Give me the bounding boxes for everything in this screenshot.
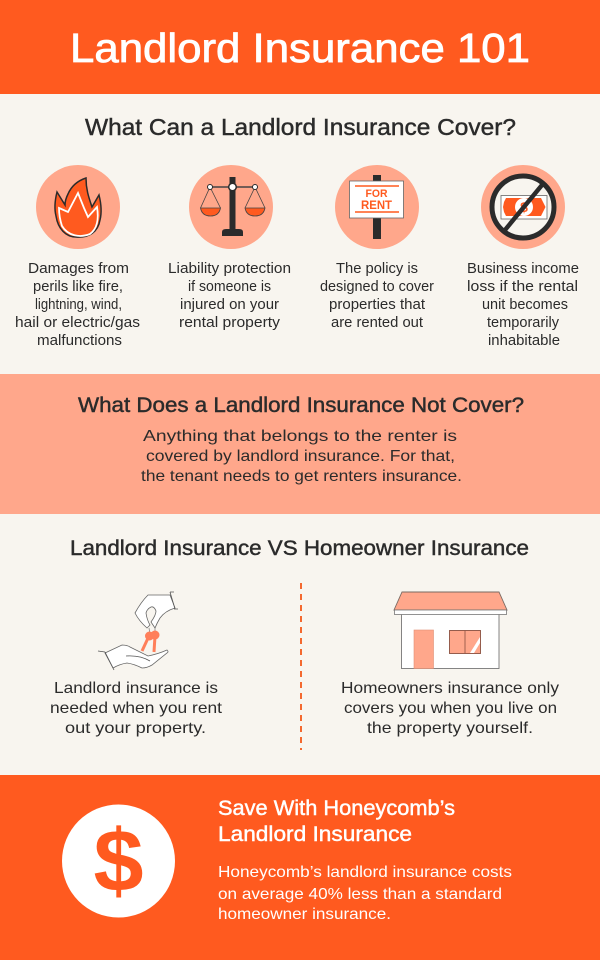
panel: save with honeycomb: on average 40% less than a standard — [218, 886, 502, 903]
heading: landlord vs homeowner: Landlord Insurance VS Homeowner Insurance — [70, 537, 529, 560]
heading: what can a landlord insurance cover: What Can a Landlord Insurance Cover? — [85, 114, 516, 140]
icon: dollar coin: $ — [94, 811, 144, 910]
panel: not covered: covered by landlord insurance. For that, — [146, 448, 455, 465]
icon: for rent sign: FOR — [366, 188, 388, 200]
icon: dollar coin — [62, 804, 175, 918]
text: liability: Liability protection — [168, 261, 291, 277]
text: damages: lightning, wind, — [35, 297, 122, 313]
text: liability — [168, 261, 291, 331]
text: policy — [320, 261, 434, 331]
text: business income: Business income — [467, 261, 579, 277]
panel: save with honeycomb: Honeycomb’s landlord insurance costs — [218, 864, 512, 881]
panel: save with honeycomb: Save With Honeycomb’s — [218, 797, 455, 820]
panel: not covered: What Does a Landlord Insurance Not Cover? — [78, 394, 524, 417]
text: homeowner note: covers you when you live on — [344, 700, 557, 717]
text: homeowner note — [341, 680, 559, 737]
icon: for rent sign — [335, 165, 419, 249]
text: homeowner note: Homeowners insurance only — [341, 680, 559, 697]
divider — [300, 583, 302, 750]
panel: save with honeycomb: Landlord Insurance — [218, 823, 412, 846]
text: damages: Damages from — [28, 261, 129, 277]
title banner — [0, 0, 600, 94]
panel: not covered — [0, 374, 600, 514]
text: damages — [15, 261, 140, 349]
text: liability: injured on your — [180, 297, 279, 313]
text: liability: rental property — [179, 315, 281, 331]
panel: save with honeycomb: homeowner insurance. — [218, 906, 391, 923]
text: landlord insurance note: needed when you rent — [50, 700, 223, 717]
text: damages: hail or electric/gas — [15, 315, 140, 331]
text: policy: are rented out — [331, 315, 423, 331]
icon: fire — [36, 165, 120, 249]
text: policy: designed to cover — [320, 279, 434, 295]
icon: scales — [189, 165, 273, 249]
icon: no money — [481, 165, 565, 249]
panel: not covered: Anything that belongs to the renter is — [143, 428, 457, 445]
text: policy: The policy is — [336, 261, 418, 277]
icon: no money: $ — [520, 199, 528, 215]
text: landlord insurance note — [50, 680, 223, 737]
text: business income — [467, 261, 579, 349]
text: landlord insurance note: out your property. — [65, 720, 206, 737]
icon: for rent sign: RENT — [361, 198, 393, 212]
text: landlord insurance note: Landlord insurance is — [54, 680, 218, 697]
text: business income: inhabitable — [488, 333, 560, 349]
icon: house — [394, 592, 507, 668]
panel: save with honeycomb — [0, 775, 600, 960]
text: liability: if someone is — [188, 279, 271, 295]
title banner: Landlord Insurance 101 — [70, 25, 530, 71]
text: business income: unit becomes — [482, 297, 568, 313]
text: damages: perils like fire, — [33, 279, 123, 295]
text: homeowner note: the property yourself. — [367, 720, 533, 737]
text: business income: loss if the rental — [467, 279, 578, 295]
icon: hands with keys — [98, 592, 178, 670]
text: policy: properties that — [329, 297, 425, 313]
text: damages: malfunctions — [37, 333, 122, 349]
panel: not covered: the tenant needs to get renters insurance. — [141, 468, 462, 485]
text: business income: temporarily — [487, 315, 560, 331]
